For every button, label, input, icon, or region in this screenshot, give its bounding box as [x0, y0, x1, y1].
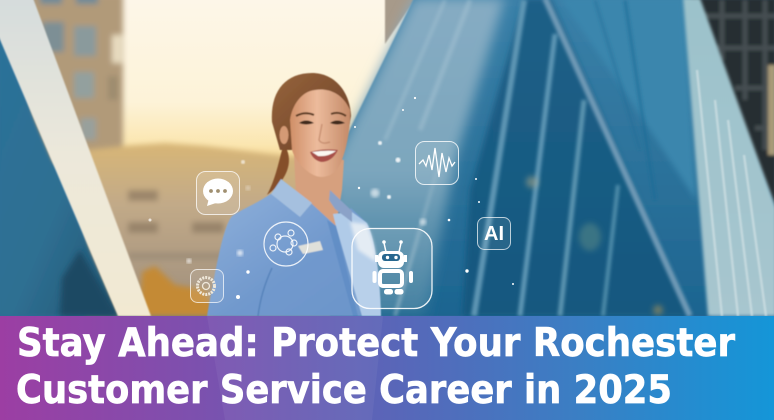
icon: AI tile: AI [484, 223, 504, 245]
sparkles [148, 97, 514, 299]
big glass tower [330, 0, 712, 316]
sky glow [118, 0, 412, 161]
shirt collar [271, 179, 312, 217]
shirt body [207, 193, 381, 316]
left white beam [0, 0, 151, 316]
eyes [299, 120, 345, 124]
neck [294, 155, 344, 226]
shirt right highlight [333, 212, 381, 316]
far tan sliver [385, 0, 416, 44]
icon: AI tile [478, 218, 510, 250]
dark tower top right [697, 0, 774, 206]
banner: purple to blue gradient [0, 316, 774, 420]
title [16, 321, 736, 413]
warm reflections [526, 176, 663, 315]
tower lit right pane [582, 20, 696, 195]
subject: woman in blue shirt [207, 73, 381, 316]
tower dark centre [462, 0, 690, 316]
icon: sound wave [416, 142, 458, 184]
tower ribs [385, 0, 690, 316]
sleeve fold [258, 268, 272, 316]
warm foliage [140, 266, 215, 316]
left building dark corner [60, 250, 118, 316]
right striped facade [683, 0, 774, 316]
shirt white glare [350, 222, 376, 262]
tan high-rise [30, 0, 123, 164]
facade stripes [697, 70, 766, 316]
ponytail [267, 150, 289, 195]
icon: robot [352, 228, 432, 308]
tower pale left face [330, 0, 505, 316]
nose shadow [319, 124, 330, 143]
smile [310, 149, 338, 162]
icon: gear [190, 270, 224, 302]
title: Customer Service Career in 2025 [16, 368, 672, 413]
left glass building [12, 104, 118, 316]
icon: chat bubble [196, 172, 240, 214]
icon: network circle [264, 222, 308, 266]
ear [280, 126, 288, 144]
hair back [272, 73, 351, 150]
brows [296, 113, 346, 116]
name badge [298, 241, 323, 254]
background: city scene at sunset [0, 0, 774, 316]
shirt placket [327, 220, 362, 316]
face [290, 90, 350, 177]
banner shirt tint [207, 316, 383, 420]
distant low building [85, 143, 350, 316]
